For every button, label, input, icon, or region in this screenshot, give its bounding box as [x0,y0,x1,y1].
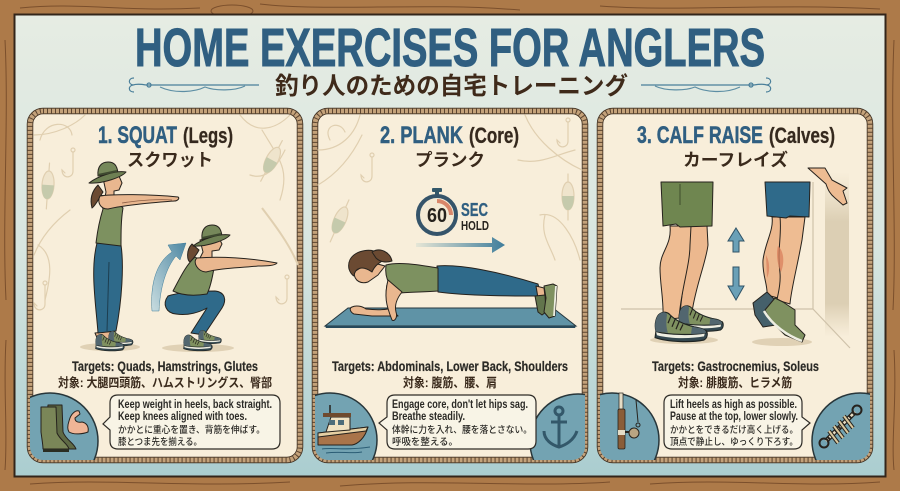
tip circle: spring [811,392,870,460]
panel: calf raise [596,108,874,464]
targets: Targets: Gastrocnemius, Soleus [652,358,819,374]
speech bubble: squat tips: かかとに重心を置き、背筋を伸ばす。 [118,424,265,436]
speech bubble: plank tips: Breathe steadily. [392,409,465,423]
tip circle: boat [315,392,378,460]
targets: Targets: Quads, Hamstrings, Glutes [72,358,258,374]
figure: hand on wall [808,168,847,205]
left ornament [129,78,259,92]
targets [58,358,272,390]
heading: 2. PLANK [380,122,463,149]
targets: 対象: 腹筋、腰、肩 [403,375,497,390]
figure: standing squat [80,162,179,351]
label: sec hold [461,200,489,233]
heading: 3. CALF RAISE [637,122,763,149]
speech bubble: squat tips: Keep knees aligned with toes. [118,409,247,423]
speech bubble: plank tips: 体幹に力を入れ、腰を落とさない。 [392,424,532,436]
tip circle: boots and muscle [30,392,99,460]
speech bubble: squat tips: 膝とつま先を揃える。 [118,436,202,448]
panel: squat [26,108,304,464]
heading: (Calves) [769,123,835,148]
speech bubble: calf tips: Lift heels as high as possible. [670,397,797,411]
icon: stopwatch: 60 [427,205,447,227]
icon: stopwatch [418,188,456,234]
targets [652,358,819,390]
speech bubble: squat tips [103,395,280,449]
arrow: hold [416,237,505,253]
speech bubble: plank tips: 呼吸を整える。 [392,436,458,448]
arrow: squat direction [152,243,186,311]
speech bubble: calf tips: かかとをできるだけ高く上げる。 [670,424,798,436]
figure: flat feet legs [650,182,723,344]
right ornament [641,78,771,92]
japanese heading: スクワット [127,150,213,170]
japanese heading: プランク [415,150,485,170]
figure: raised heel legs [752,182,812,346]
tip circle: fishing rod [600,392,660,460]
targets [332,358,568,390]
targets: 対象: 腓腹筋、ヒラメ筋 [678,375,792,390]
figure: lowered squat [162,225,277,352]
targets: Targets: Abdominals, Lower Back, Shoulders [332,358,568,374]
subtitle: 釣り人のための自宅トレーニング [275,72,628,100]
heading: (Legs) [183,123,233,148]
speech bubble: calf tips: 頂点で静止し、ゆっくり下ろす。 [670,436,798,448]
speech bubble: plank tips: Engage core, don't let hips sag. [392,397,528,411]
speech bubble: plank tips [379,395,536,449]
heading: (Core) [469,123,519,148]
speech bubble: calf tips: Pause at the top, lower slowly. [670,409,798,423]
targets: 対象: 大腿四頭筋、ハムストリングス、臀部 [58,375,272,390]
figure: plank [349,250,557,321]
exercise mat [325,308,576,328]
room lines [621,172,850,348]
label: sec hold: SEC [461,200,488,220]
japanese heading: カーフレイズ [683,150,788,170]
panel: plank [312,108,588,464]
heading: 1. SQUAT [98,122,177,149]
tip circle: anchor [530,393,585,460]
speech bubble: squat tips: Keep weight in heels, back straight. [118,397,272,411]
arrows: up and down [728,228,744,300]
speech bubble: calf tips [664,395,810,449]
label: sec hold: HOLD [461,218,489,233]
